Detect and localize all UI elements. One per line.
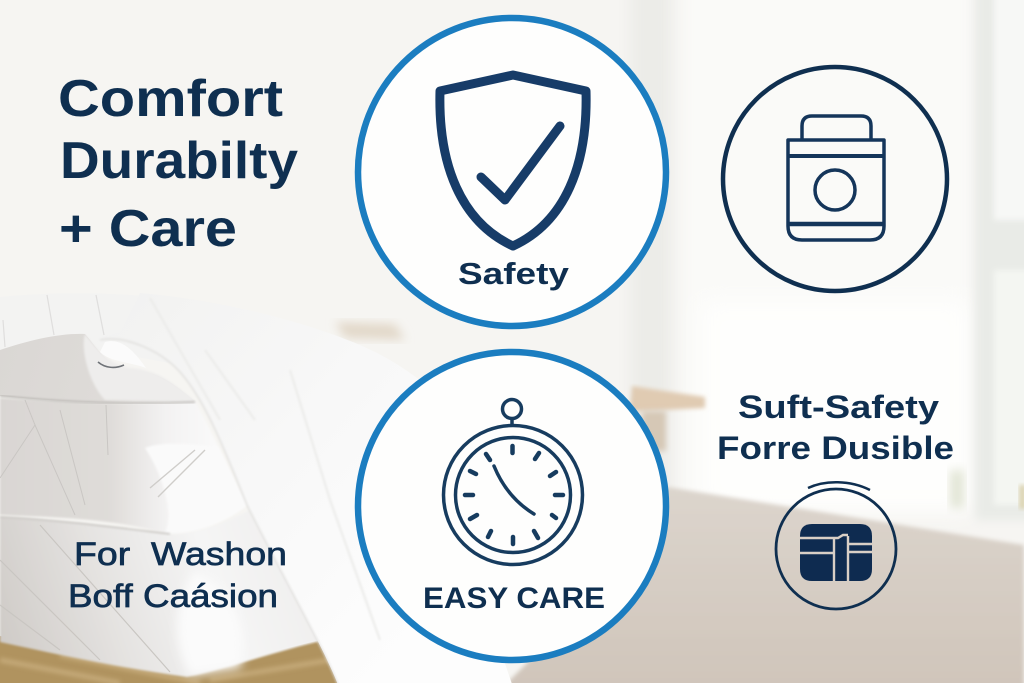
title: + Care — [59, 200, 237, 258]
icon: folded fabric badge — [776, 482, 896, 609]
basket under quilt — [0, 636, 345, 683]
title — [58, 70, 298, 258]
caption: for washon: For Washon — [74, 536, 287, 572]
fold layer 2 — [0, 398, 247, 533]
caption: for washon — [68, 536, 287, 614]
top drape sheet — [90, 293, 514, 683]
floor — [490, 487, 1024, 683]
fold layer 3 — [0, 510, 325, 677]
title: Durabilty — [60, 132, 298, 190]
icon: jar — [788, 116, 884, 240]
caption: suft-safety: Suft-Safety — [738, 389, 939, 425]
top quilted panel — [0, 293, 260, 380]
title: Comfort — [58, 70, 283, 128]
label: easy care: EASY CARE — [423, 582, 605, 615]
caption: for washon: Boff Caásion — [68, 578, 278, 614]
folded white quilt — [0, 293, 514, 683]
icon: shield with check — [440, 75, 586, 246]
panel: easy care badge — [358, 352, 666, 660]
label: safety: Safety — [458, 256, 570, 291]
panel: safety badge — [358, 18, 666, 326]
panel: product jar badge — [723, 67, 947, 291]
wooden side table — [630, 386, 705, 411]
caption: suft-safety: Forre Dusible — [717, 430, 954, 466]
fold layer 1 — [0, 334, 195, 403]
caption: suft-safety — [717, 389, 954, 466]
icon: stopwatch — [444, 400, 582, 564]
